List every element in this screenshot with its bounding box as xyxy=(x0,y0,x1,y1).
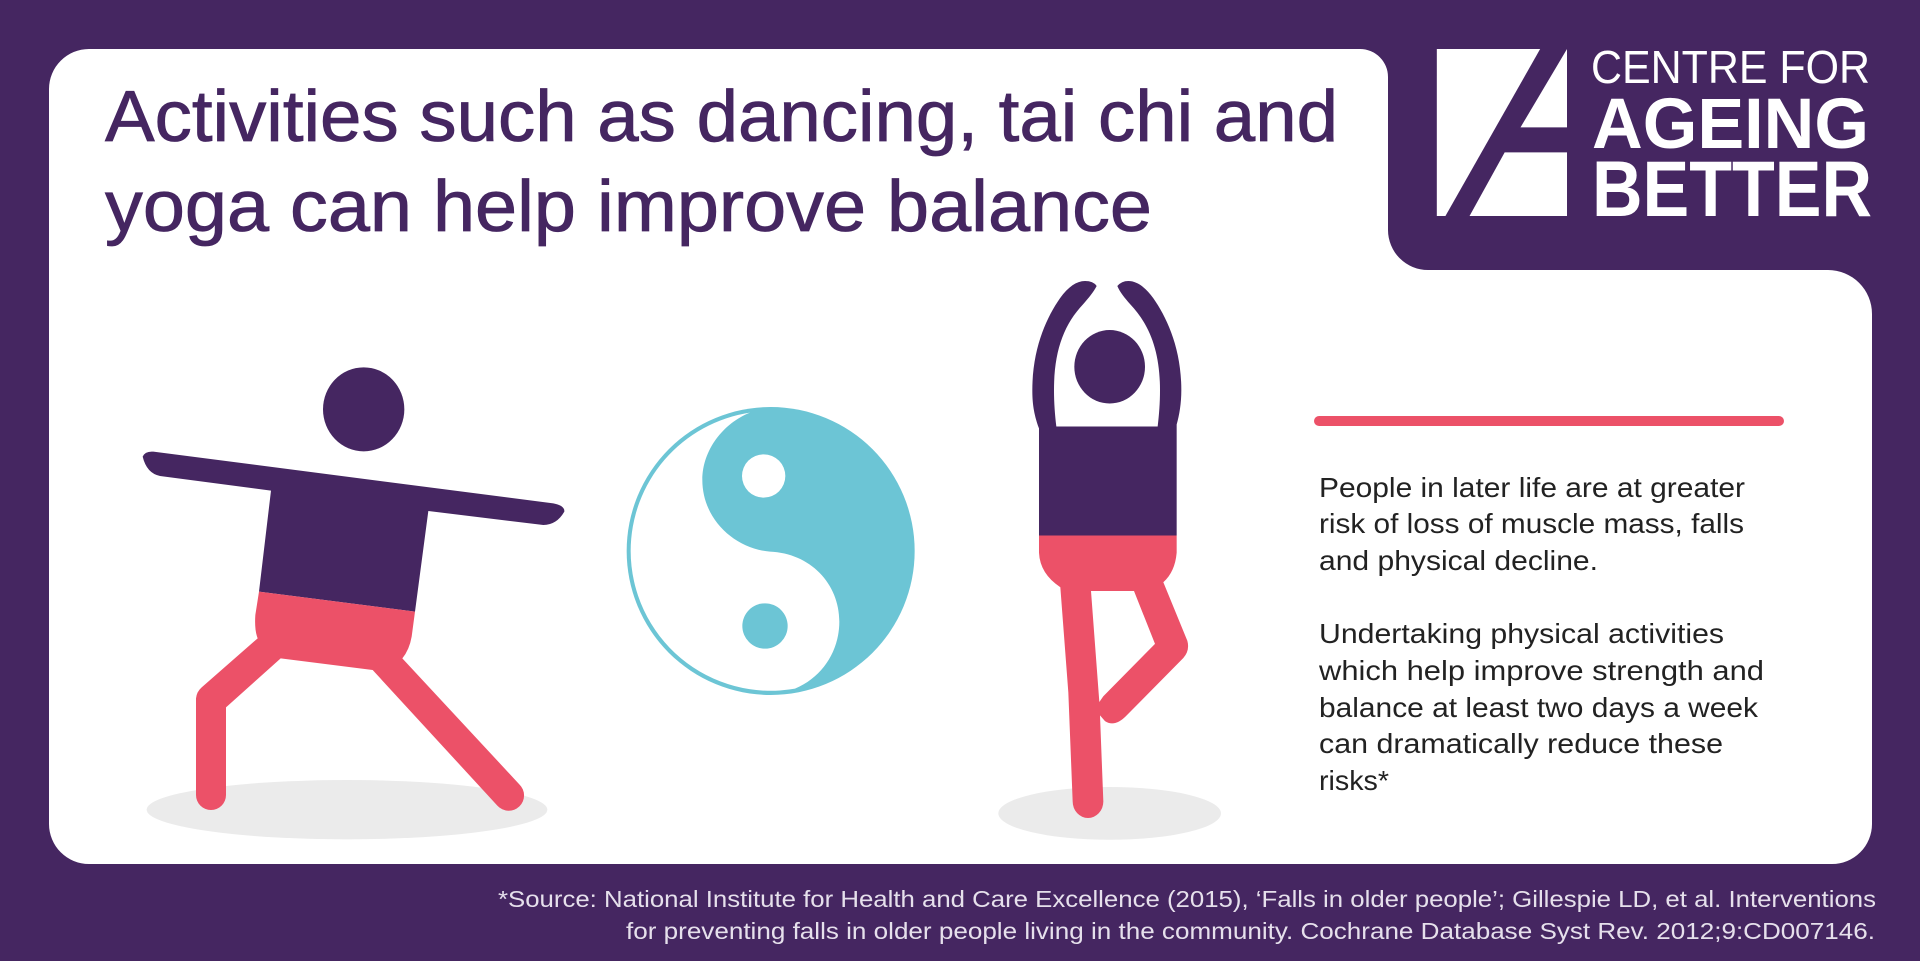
title xyxy=(105,77,1338,247)
source footnote: *Source: National Institute for Health and Care Excellence (2015), ‘Falls in older people’; Gillespie LD, et al. Interventions xyxy=(498,886,1876,912)
logo wordmark: BETTER xyxy=(1592,144,1872,233)
text block: body copy xyxy=(1318,472,1764,796)
logo wordmark xyxy=(1591,41,1872,233)
text block: body copy: which help improve strength and xyxy=(1318,655,1764,686)
logo wordmark: AGEING xyxy=(1592,85,1869,164)
text block: body copy: People in later life are at greater xyxy=(1319,472,1745,503)
head xyxy=(323,367,404,451)
title: Activities such as dancing, tai chi and xyxy=(105,77,1338,157)
source footnote: for preventing falls in older people living in the community. Cochrane Database Syst Rev. 2012;9:CD007146. xyxy=(626,918,1875,944)
arms and torso xyxy=(1032,281,1181,536)
logo wordmark: CENTRE FOR xyxy=(1591,41,1870,93)
text block: body copy: balance at least two days a week xyxy=(1319,692,1759,723)
text block: body copy: risks* xyxy=(1319,765,1389,796)
shorts and legs xyxy=(196,592,524,811)
title: yoga can help improve balance xyxy=(105,167,1152,247)
text block: body copy: and physical decline. xyxy=(1319,545,1598,576)
ground shadow xyxy=(998,787,1221,840)
logo: Centre for Ageing Better xyxy=(1437,41,1872,233)
source footnote xyxy=(498,886,1876,944)
divider: pink rule xyxy=(1314,416,1784,426)
icon: yin yang xyxy=(627,407,915,695)
shorts and legs xyxy=(1039,536,1188,818)
figure: warrior yoga pose xyxy=(143,367,564,839)
figure: tree yoga pose xyxy=(998,281,1221,840)
head xyxy=(1074,330,1145,404)
ground shadow xyxy=(147,780,547,839)
text block: body copy: can dramatically reduce these xyxy=(1319,728,1723,759)
logo mark: stylised A xyxy=(1437,49,1567,216)
text block: body copy: risk of loss of muscle mass, falls xyxy=(1319,508,1744,539)
arms and torso xyxy=(143,452,564,612)
text block: body copy: Undertaking physical activities xyxy=(1319,618,1724,649)
